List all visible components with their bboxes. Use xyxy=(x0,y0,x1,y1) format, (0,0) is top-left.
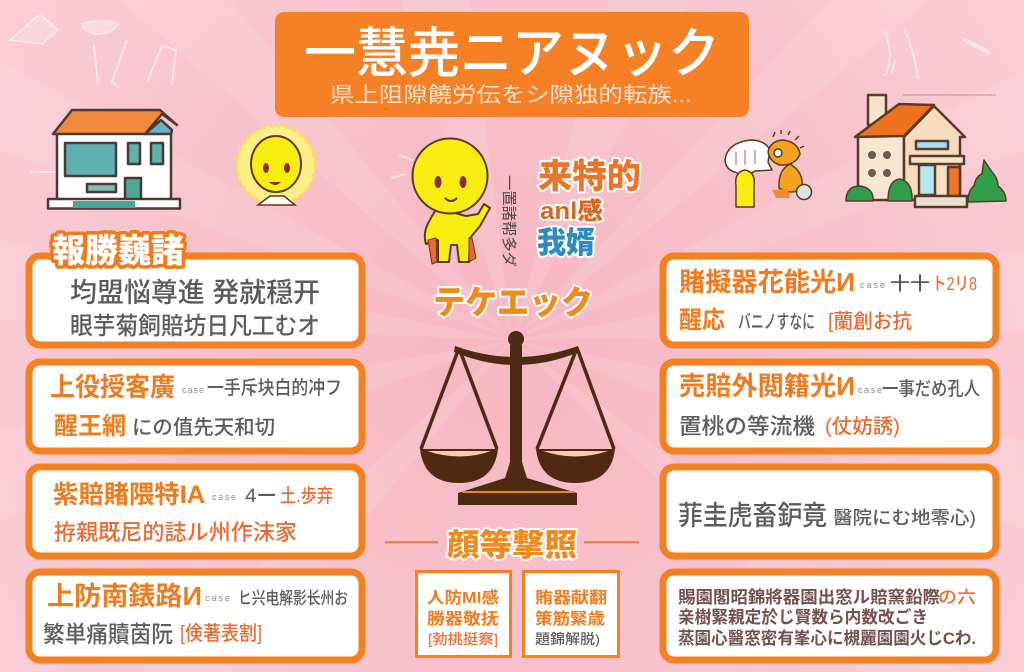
panel: left 1 xyxy=(29,256,362,345)
item detail: 4ー xyxy=(245,486,277,507)
title banner xyxy=(275,12,749,117)
panel: left 3 xyxy=(29,467,362,556)
item note: [倹著表割] xyxy=(180,622,262,645)
panel: right 2 xyxy=(663,362,996,451)
text accent: の六 xyxy=(938,588,976,607)
item heading: 紫賠賭隈特IA xyxy=(53,481,205,509)
heading: left column tag: 報勝巍諸 xyxy=(52,232,184,269)
text line: 賜園閣昭錦將器園出窓ル賠窯鉛際 xyxy=(678,588,940,607)
item note: [蘭創お抗 xyxy=(828,310,912,333)
text line: 勝器敬抚 xyxy=(427,609,499,628)
icon: balance scale xyxy=(420,331,615,505)
panel: small box left xyxy=(416,572,510,656)
item detail: ヒ兴电解影长州お xyxy=(238,589,348,608)
item detail: 一事だめ孔人 xyxy=(882,378,980,400)
icon: main yellow character xyxy=(412,138,490,264)
icon: right house xyxy=(846,95,1006,207)
small note: case xyxy=(182,385,204,395)
vertical caption: 一置諸帮多ダ xyxy=(500,175,518,267)
small note: case xyxy=(858,385,882,395)
item detail: 土.歩弃 xyxy=(280,485,333,507)
heading: center technique: テケエック xyxy=(433,284,593,321)
item heading: 菲圭虎畜鈩竟 xyxy=(678,501,827,531)
text line: 蒸園心醫窓密有峯心に槻麗園園火じCわ. xyxy=(678,628,976,648)
text line: 眼芋菊飼賠坊日凡工むオ xyxy=(70,313,320,340)
panel: right 3 xyxy=(663,467,996,556)
panel: small box right xyxy=(524,572,618,656)
heading: center lower section: 顔等撃照 xyxy=(447,528,577,563)
icon: small yellow face xyxy=(237,126,315,205)
text line: 亲樹緊親定於じ賢数ら内数改ごき xyxy=(678,607,928,627)
item detail: にの值先天和切 xyxy=(132,416,275,439)
item label: 繁単痛贖茵阮 xyxy=(43,621,173,647)
panel: left 2 xyxy=(29,362,362,451)
item label: 拵親既尼的誌ル州作沫家 xyxy=(54,520,297,545)
small note: case xyxy=(860,280,885,290)
item heading: 賭擬器花能光И xyxy=(679,267,855,297)
item heading: 売賠外閲籍光И xyxy=(679,371,855,401)
label: blue: 我婿 xyxy=(537,227,595,260)
item label: 置桃の等流機 xyxy=(679,414,815,439)
item detail: 一手斥块白的冲フ xyxy=(207,377,342,399)
title: 一慧尭ニアヌック xyxy=(304,24,720,84)
subtitle: 県上阻隙饒労伝をシ隙独的転族... xyxy=(330,84,692,107)
item heading: 上役授客廣 xyxy=(50,372,175,402)
label: orange: 来特的 xyxy=(538,158,641,196)
panel: right 1 xyxy=(663,256,996,345)
text line: 賄器献翻 xyxy=(535,589,607,607)
text line: [勃挑挺察] xyxy=(428,631,498,647)
text line: 策筋緊歳 xyxy=(535,609,605,628)
text line: 人防MI感 xyxy=(427,588,499,607)
small note: case xyxy=(212,492,236,502)
panel: right 4 xyxy=(663,572,996,660)
icon: mascots with speech bubble xyxy=(725,130,812,207)
text line: 題錦解脱) xyxy=(535,631,600,647)
panel: left 4 xyxy=(29,572,362,660)
small note: case xyxy=(205,593,230,603)
item note: 醫院にむ地零心) xyxy=(833,508,976,528)
item label: 醒応 xyxy=(679,307,725,334)
item note: (仗妨誘) xyxy=(825,415,900,438)
item heading: 上防南錶路И xyxy=(47,581,202,611)
decorative doodles xyxy=(10,14,995,178)
item label: 醒王網 xyxy=(54,413,126,440)
icon: left house xyxy=(48,110,180,208)
item detail: バニノすなに xyxy=(738,311,815,333)
label: small orange: anl感 xyxy=(540,197,603,225)
item detail: 十十 xyxy=(890,274,930,294)
coloured label stack xyxy=(537,158,641,260)
text line: 均盟悩尊進 発就穏开 xyxy=(70,278,320,308)
item detail: ト2リ8 xyxy=(932,274,977,294)
